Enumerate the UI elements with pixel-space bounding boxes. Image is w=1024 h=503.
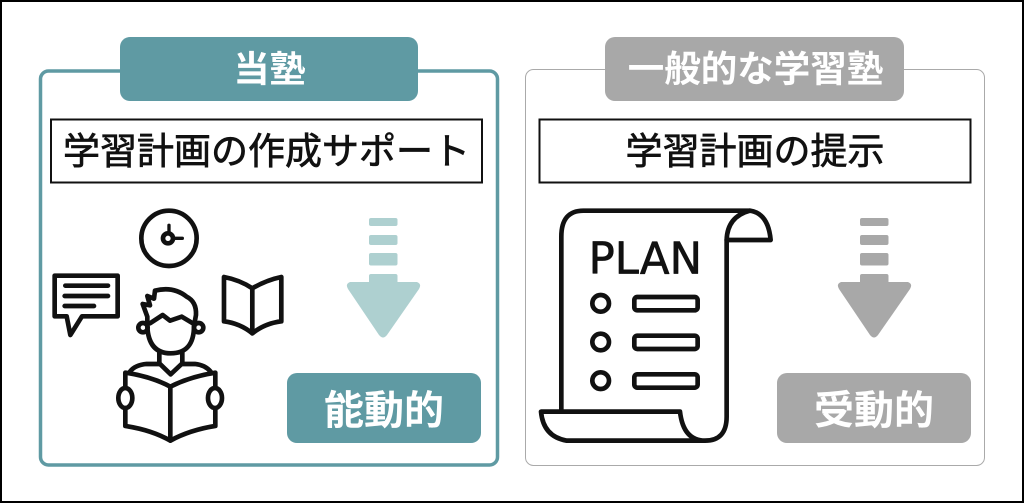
icon: student reading (118, 289, 222, 441)
icon: student with book, clock, chat, book (55, 211, 281, 441)
text block: 学習計画の作成サポート (51, 120, 482, 182)
label: 能動的: 能動的 (324, 389, 444, 433)
icon: clock (141, 211, 197, 266)
text block: 学習計画の提示: 学習計画の提示 (626, 131, 884, 172)
label: 受動的 (777, 373, 971, 443)
icon: open book (224, 277, 281, 333)
arrow: down (838, 218, 911, 338)
panel: 当塾 (40, 37, 498, 465)
arrow: down (347, 218, 420, 338)
heading: 一般的な学習塾 (605, 37, 904, 101)
heading: 一般的な学習塾: 一般的な学習塾 (628, 48, 884, 90)
text block: 学習計画の提示 (540, 120, 970, 182)
text block: 学習計画の作成サポート: 学習計画の作成サポート (63, 131, 470, 172)
icon text: PLAN: PLAN (589, 234, 702, 285)
heading: 当塾 (120, 37, 418, 101)
heading: 当塾: 当塾 (233, 48, 306, 90)
label: 受動的: 受動的 (814, 389, 934, 433)
label: 能動的 (287, 373, 481, 443)
panel: 一般的な学習塾 (526, 37, 984, 466)
icon: plan scroll (541, 211, 771, 441)
icon: chat bubble (55, 276, 118, 335)
